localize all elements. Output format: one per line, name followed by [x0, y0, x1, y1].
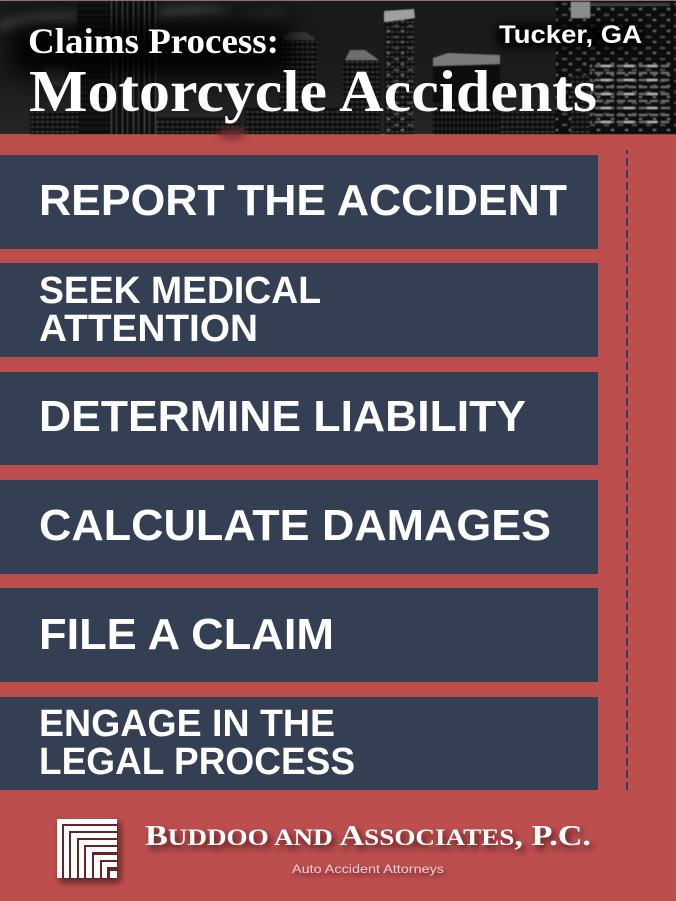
title line 2: Motorcycle Accidents	[29, 58, 597, 124]
step 4: calculate damages	[0, 480, 598, 574]
step 2: seek medical attention: SEEK MEDICAL	[39, 270, 321, 312]
step 5: file a claim	[0, 588, 598, 682]
step 1: report the accident	[0, 155, 598, 249]
dashed timeline line	[626, 150, 628, 790]
step 1: report the accident: REPORT THE ACCIDENT	[39, 176, 567, 225]
firm name: BUDDOO AND ASSOCIATES , P.C.	[145, 820, 591, 852]
title line 1: Claims Process:	[28, 21, 279, 61]
dark shade behind heading	[10, 24, 295, 76]
dark shade behind city label	[496, 24, 642, 48]
tagline: Auto Accident Attorneys	[292, 864, 444, 876]
city label: Tucker, GA	[499, 21, 642, 49]
step 6: engage in the legal process: ENGAGE IN THE	[39, 703, 335, 745]
title	[28, 21, 597, 124]
step 3: determine liability	[0, 372, 598, 465]
step 6: engage in the legal process	[0, 697, 598, 790]
step 3: determine liability: DETERMINE LIABILITY	[39, 392, 526, 441]
icon: firm logo	[57, 819, 117, 878]
step 2: seek medical attention	[0, 263, 598, 357]
step 5: file a claim: FILE A CLAIM	[39, 610, 334, 659]
step 6: engage in the legal process: LEGAL PROCESS	[39, 741, 355, 783]
step 2: seek medical attention: ATTENTION	[39, 308, 258, 350]
header photo: city skyline	[0, 0, 676, 134]
step 4: calculate damages: CALCULATE DAMAGES	[39, 501, 551, 550]
heading shadow on red band	[218, 129, 246, 139]
